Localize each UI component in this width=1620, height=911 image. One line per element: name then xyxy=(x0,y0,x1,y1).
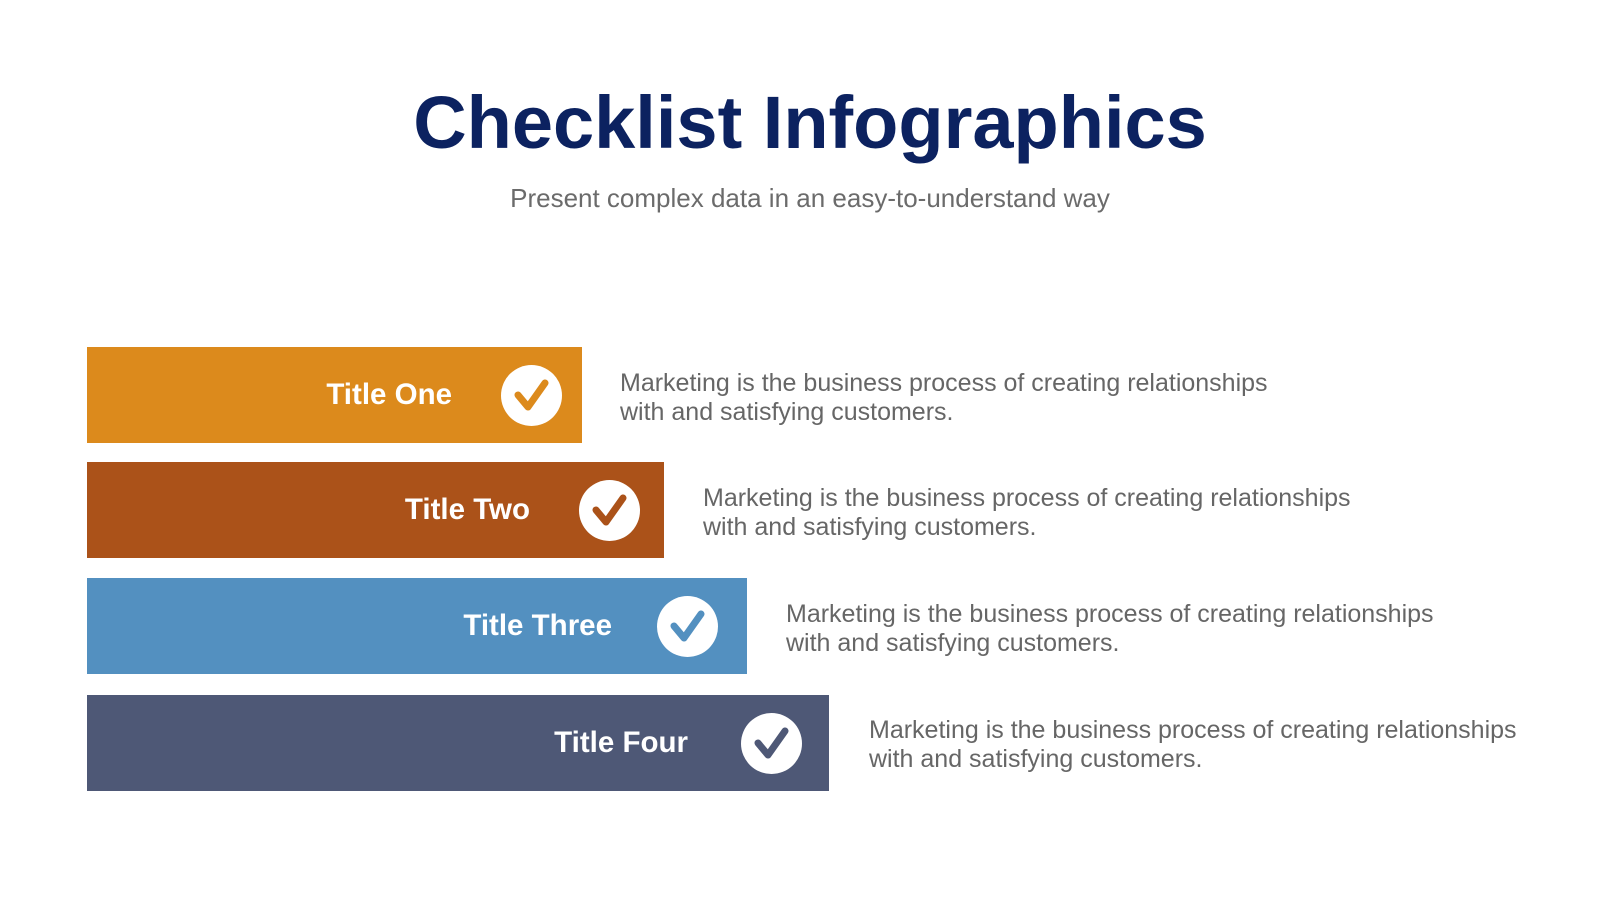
description three: Marketing is the business process of creating relationships xyxy=(786,600,1434,628)
description two: with and satisfying customers. xyxy=(703,513,1036,541)
description four xyxy=(869,716,1517,773)
bar: title three xyxy=(87,578,747,674)
description two: Marketing is the business process of creating relationships xyxy=(703,484,1351,512)
subtitle: Present complex data in an easy-to-understand way xyxy=(510,183,1110,213)
title: Checklist Infographics xyxy=(413,81,1207,164)
icon: check xyxy=(657,596,718,657)
description four: Marketing is the business process of creating relationships xyxy=(869,716,1517,744)
description one: with and satisfying customers. xyxy=(620,398,953,426)
description two xyxy=(703,484,1351,541)
bar: title four xyxy=(87,695,829,791)
label: Title Three xyxy=(463,609,612,642)
label: Title One xyxy=(326,378,452,411)
description four: with and satisfying customers. xyxy=(869,745,1202,773)
description one: Marketing is the business process of creating relationships xyxy=(620,369,1268,397)
label: Title Two xyxy=(405,493,530,526)
bar: title two xyxy=(87,462,664,558)
icon: check xyxy=(579,480,640,541)
label: Title Four xyxy=(554,726,688,759)
description three: with and satisfying customers. xyxy=(786,629,1119,657)
icon: check xyxy=(741,713,802,774)
bar: title one xyxy=(87,347,582,443)
description one xyxy=(620,369,1268,426)
description three xyxy=(786,600,1434,657)
icon: check xyxy=(501,365,562,426)
